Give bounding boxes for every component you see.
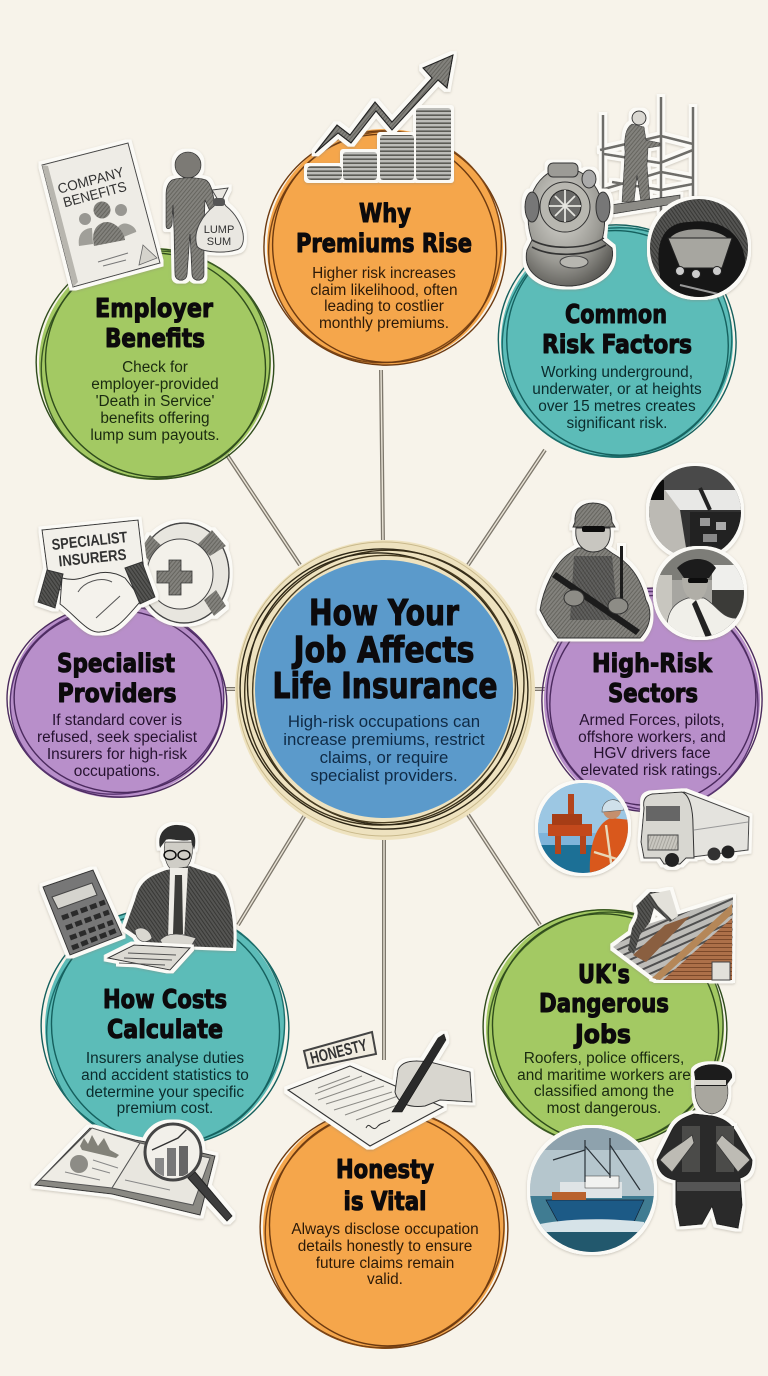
text: underwater, or at heights	[532, 381, 702, 398]
description: specialist providers.	[310, 766, 458, 785]
heading: Honesty	[336, 1155, 434, 1185]
heading: Employer	[95, 294, 213, 324]
text: lump sum payouts.	[90, 427, 220, 444]
icon: company benefits booklet: COMPANY	[56, 163, 126, 197]
icon: book and magnifying glass	[35, 1124, 232, 1221]
text: Armed Forces, pilots,	[579, 712, 725, 729]
icon: businessman writing	[125, 825, 234, 948]
icon: coin stacks with rising arrow	[307, 55, 453, 180]
title line 3: Life Insurance	[272, 666, 498, 707]
text: Insurers analyse duties	[86, 1050, 244, 1067]
text: 'Death in Service'	[96, 393, 214, 410]
icon: specialist insurers sign and handshake: SPECIALIST	[51, 529, 129, 554]
text: most dangerous.	[547, 1100, 661, 1117]
icon: specialist insurers sign and handshake: INSURERS	[58, 547, 127, 571]
text: Check for	[122, 359, 188, 376]
icon: mine cart	[650, 199, 750, 300]
panel: central hub	[192, 498, 576, 880]
heading line 3: Jobs	[573, 1020, 631, 1050]
heading: High-Risk	[592, 649, 713, 679]
text: Working underground,	[541, 364, 693, 381]
text: future claims remain	[316, 1255, 454, 1272]
text: over 15 metres creates	[538, 398, 696, 415]
panel: how costs calculate	[30, 822, 290, 1226]
heading line 2: Dangerous	[539, 989, 669, 1019]
panel: specialist providers	[0, 520, 235, 807]
text: and maritime workers are	[517, 1067, 691, 1084]
icon: person holding lump sum bag	[166, 152, 243, 280]
panel: honesty is vital	[217, 1032, 553, 1376]
icon: HGV truck	[641, 792, 749, 867]
text: and accident statistics to	[81, 1067, 249, 1084]
icon: offshore rig photo	[538, 783, 630, 875]
panel: UK's dangerous jobs	[482, 887, 756, 1257]
icon: fishing boat photo	[530, 1128, 654, 1256]
text: elevated risk ratings.	[580, 762, 722, 779]
text: employer-provided	[91, 376, 219, 393]
icon: pilot photo	[656, 549, 744, 640]
icon: police officer	[657, 1064, 752, 1228]
heading line 2: Benefits	[105, 324, 205, 354]
icon: company benefits booklet	[42, 143, 160, 287]
text: benefits offering	[100, 410, 210, 427]
text: monthly premiums.	[319, 315, 449, 332]
icon: person holding lump sum bag: SUM	[207, 236, 231, 248]
title: How Your	[309, 593, 459, 634]
text: details honestly to ensure	[298, 1238, 472, 1255]
heading line 2: Providers	[58, 679, 176, 709]
heading line 2: is Vital	[344, 1187, 426, 1217]
heading: Specialist	[57, 649, 175, 679]
icon: soldier	[540, 503, 650, 638]
icon: specialist insurers sign and handshake	[38, 520, 155, 632]
panel: employer benefits	[0, 143, 316, 525]
icon: person holding lump sum bag: LUMP	[204, 224, 234, 236]
icon: worker on scaffold	[600, 97, 693, 214]
text: classified among the	[534, 1083, 674, 1100]
heading line 2: Premiums Rise	[296, 229, 472, 259]
text: Roofers, police officers,	[524, 1050, 684, 1067]
heading: UK's	[578, 960, 630, 990]
text: determine your specific	[86, 1084, 244, 1101]
text: significant risk.	[567, 415, 667, 432]
icon: roofer on roof	[613, 890, 733, 980]
description: increase premiums, restrict	[283, 730, 485, 749]
text: HGV drivers face	[593, 745, 711, 762]
icon: signed document and pen	[288, 1034, 472, 1146]
panel: common risk factors	[498, 94, 752, 458]
heading line 2: Sectors	[608, 679, 698, 709]
text: refused, seek specialist	[37, 729, 198, 746]
text: Higher risk increases	[312, 265, 456, 282]
panel: why premiums rise	[221, 55, 549, 410]
text: premium cost.	[117, 1100, 213, 1117]
heading line 2: Risk Factors	[542, 330, 692, 360]
description: claims, or require	[320, 748, 448, 767]
text: If standard cover is	[52, 712, 182, 729]
icon: calculator	[43, 870, 122, 955]
description: High-risk occupations can	[288, 712, 480, 731]
connector spokes	[225, 370, 545, 1060]
icon: clipboard with form	[108, 945, 190, 970]
icon: diving helmet	[525, 163, 613, 286]
icon: life buoy	[139, 523, 229, 623]
title line 2: Job Affects	[291, 630, 474, 671]
text: valid.	[367, 1271, 403, 1288]
heading: Common	[565, 300, 667, 330]
icon: honesty stamp: HONESTY	[308, 1035, 370, 1068]
heading: How Costs	[103, 985, 227, 1015]
text: Always disclose occupation	[291, 1221, 479, 1238]
text: claim likelihood, often	[310, 282, 458, 299]
icon: cockpit photo	[649, 466, 742, 562]
text: leading to costlier	[324, 298, 444, 315]
text: offshore workers, and	[578, 729, 726, 746]
heading line 2: Calculate	[107, 1015, 223, 1045]
text: occupations.	[74, 763, 160, 780]
icon: company benefits booklet: BENEFITS	[61, 178, 128, 210]
heading: Why	[359, 199, 411, 229]
panel: high-risk sectors	[512, 466, 768, 875]
text: Insurers for high-risk	[47, 746, 187, 763]
